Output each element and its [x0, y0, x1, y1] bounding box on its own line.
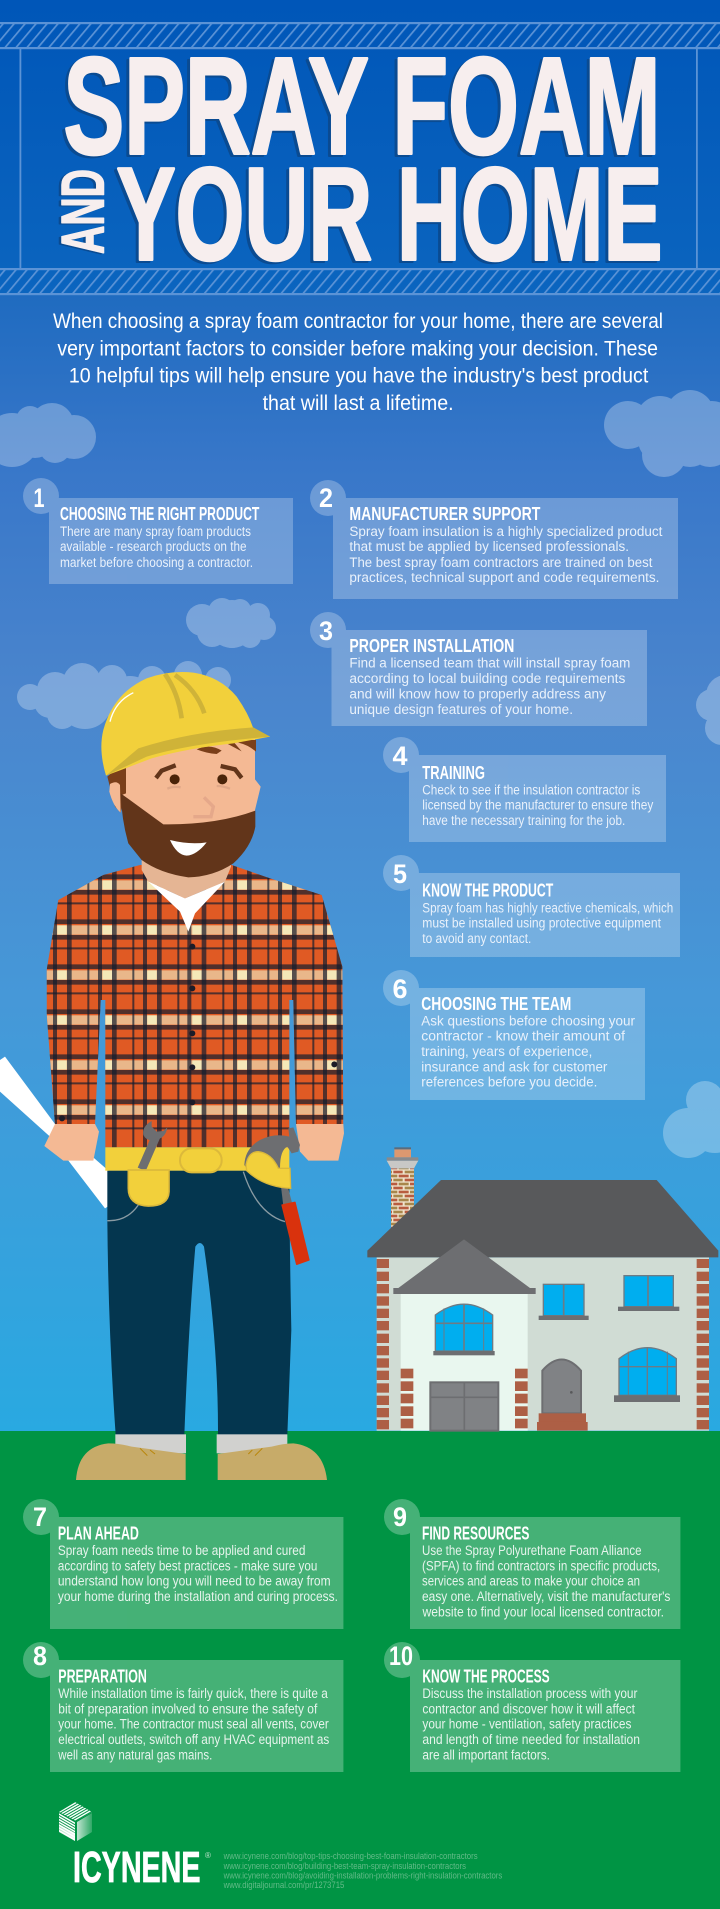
clouds: [0, 390, 720, 1158]
panel: tip 2 manufacturer support: that must be applied by licensed professionals.: [349, 539, 629, 554]
panel: tip 8 preparation: While installation time is fairly quick, there is quite a: [58, 1686, 328, 1701]
panel: tip 6 choosing the team: insurance and ask for customer: [421, 1059, 608, 1074]
header banner: [0, 0, 720, 295]
panel: tip 10 know the process: KNOW THE PROCESS: [422, 1667, 550, 1687]
panel: tip 10 know the process: contractor and discover how it will affect: [422, 1701, 635, 1716]
pants and boots: [76, 1171, 327, 1480]
panel: tip 4 training: have the necessary training for the job.: [422, 813, 625, 828]
panel: tip 1 choosing the right product: [23, 478, 293, 584]
panel: tip 5 know the product: KNOW THE PRODUCT: [422, 881, 553, 901]
panel: tip 8 preparation: bit of preparation involved to ensure the safety of: [58, 1701, 318, 1716]
panel: tip 1 choosing the right product: There are many spray foam products: [60, 524, 251, 539]
panel: tip 8 preparation: electrical outlets, switch off any HVAC equipment as: [58, 1732, 330, 1747]
panel: tip 1 choosing the right product: available - research products on the: [60, 539, 246, 554]
source links: www.digitaljournal.com/pr/1273715: [223, 1880, 344, 1891]
panel: tip 9 find resources: [384, 1499, 680, 1629]
panel: tip 7 plan ahead: Spray foam needs time to be applied and cured: [58, 1543, 305, 1558]
source links: www.icynene.com/blog/top-tips-choosing-best-foam-insulation-contractors: [223, 1851, 478, 1862]
panel: tip 10 know the process: 10: [389, 1641, 413, 1671]
panel: tip 9 find resources: services and areas to make your choice an: [422, 1574, 640, 1589]
panel: tip 7 plan ahead: according to safety best practices - make sure you: [58, 1558, 317, 1573]
main wall: [377, 1257, 709, 1431]
panel: tip 5 know the product: 5: [393, 859, 407, 889]
panel: tip 6 choosing the team: references before you decide.: [421, 1075, 597, 1090]
blueprint roll: [0, 1057, 121, 1208]
panel: tip 3 proper installation: PROPER INSTALLATION: [349, 636, 514, 656]
ground: [0, 1431, 720, 1909]
panel: tip 10 know the process: [384, 1641, 680, 1772]
panel: tip 8 preparation: 8: [33, 1641, 47, 1671]
panel: tip 9 find resources: (SPFA) to find contractors in specific products,: [422, 1558, 660, 1573]
panel: tip 3 proper installation: unique design features of your home.: [349, 702, 573, 717]
panel: tip 4 training: [383, 737, 666, 842]
panel: tip 7 plan ahead: PLAN AHEAD: [58, 1523, 139, 1543]
panel: tip 1 choosing the right product: 1: [34, 483, 44, 513]
panel: tip 5 know the product: must be installed using protective equipment: [422, 916, 661, 931]
intro text: very important factors to consider before making your decision. These: [57, 338, 658, 360]
window middle: [539, 1284, 589, 1320]
panel: tip 7 plan ahead: your home during the installation and curing process.: [58, 1589, 338, 1604]
panel: tip 1 choosing the right product: market before choosing a contractor.: [60, 555, 253, 570]
source links: [223, 1851, 503, 1891]
panel: tip 7 plan ahead: [23, 1499, 343, 1629]
panel: tip 10 know the process: your home - ventilation, safety practices: [422, 1717, 632, 1732]
window upper right: [618, 1276, 679, 1311]
panel: tip 2 manufacturer support: MANUFACTURER SUPPORT: [349, 504, 540, 524]
panel: tip 6 choosing the team: CHOOSING THE TEAM: [421, 994, 571, 1014]
panel: tip 9 find resources: website to find your local licensed contractor.: [422, 1605, 664, 1620]
illustration: house: [367, 1147, 718, 1431]
logo: Icynene cube and wordmark: [59, 1802, 211, 1892]
sky background: [0, 295, 720, 1431]
panel: tip 7 plan ahead: understand how long you will need to be away from: [58, 1574, 331, 1589]
front bay: [401, 1294, 528, 1431]
panel: tip 6 choosing the team: Ask questions before choosing your: [421, 1013, 635, 1028]
panel: tip 6 choosing the team: 6: [392, 974, 408, 1004]
front door: [537, 1359, 588, 1431]
panel: tip 5 know the product: to avoid any contact.: [422, 931, 531, 946]
panel: tip 9 find resources: easy one. Alternatively, visit the manufacturer's: [422, 1589, 671, 1604]
panel: tip 2 manufacturer support: The best spray foam contractors are trained on best: [349, 555, 653, 570]
arched window front: [433, 1304, 495, 1355]
main roof: [367, 1180, 718, 1257]
panel: tip 6 choosing the team: contractor - know their amount of: [421, 1029, 625, 1044]
source links: www.icynene.com/blog/avoiding-installation-problems-right-insulation-contractors: [223, 1870, 503, 1882]
panel: tip 6 choosing the team: [383, 970, 645, 1100]
panel: tip 6 choosing the team: training, years of experience,: [421, 1044, 592, 1059]
garage door: [430, 1382, 498, 1431]
panel: tip 9 find resources: FIND RESOURCES: [422, 1523, 529, 1543]
panel: tip 3 proper installation: and will know how to properly address any: [349, 686, 606, 701]
logo: Icynene cube and wordmark: ICYNENE: [73, 1843, 200, 1892]
intro text: that will last a lifetime.: [263, 392, 454, 415]
logo: Icynene cube and wordmark: ®: [205, 1851, 211, 1860]
title: AND: [50, 169, 116, 254]
panel: tip 2 manufacturer support: 2: [319, 483, 333, 513]
icon: cube: [59, 1802, 92, 1841]
panel: tip 7 plan ahead: 7: [33, 1502, 47, 1532]
panel: tip 4 training: Check to see if the insulation contractor is: [422, 782, 641, 797]
panel: tip 3 proper installation: 3: [319, 616, 333, 646]
intro text: When choosing a spray foam contractor for your home, there are several: [53, 310, 663, 333]
panel: tip 4 training: licensed by the manufacturer to ensure they: [422, 798, 654, 813]
belt, hands and tools: [44, 1121, 344, 1264]
source links: www.icynene.com/blog/building-best-team-spray-insulation-contractors: [223, 1861, 466, 1872]
intro text: 10 helpful tips will help ensure you have the industry's best product: [69, 364, 648, 388]
panel: tip 10 know the process: are all important factors.: [422, 1747, 550, 1762]
front roof: [393, 1239, 536, 1294]
panel: tip 8 preparation: your home. The contractor must seal all vents, cover: [58, 1717, 329, 1732]
title: [47, 30, 662, 290]
title: AND: [47, 170, 114, 255]
plaid shirt and head: [43, 672, 347, 1150]
panel: tip 1 choosing the right product: CHOOSING THE RIGHT PRODUCT: [60, 504, 259, 524]
panel: tip 2 manufacturer support: practices, technical support and code requirements.: [349, 570, 659, 585]
panel: tip 3 proper installation: Find a licensed team that will install spray foam: [349, 656, 630, 671]
panel: tip 3 proper installation: [310, 612, 647, 726]
panel: tip 9 find resources: Use the Spray Polyurethane Foam Alliance: [422, 1543, 642, 1558]
chimney: [387, 1147, 418, 1228]
panel: tip 10 know the process: and length of time needed for installation: [422, 1732, 640, 1747]
panel: tip 2 manufacturer support: Spray foam insulation is a highly specialized product: [349, 524, 663, 539]
illustration: worker: [0, 672, 347, 1480]
panel: tip 4 training: TRAINING: [422, 763, 485, 783]
panel: tip 5 know the product: [383, 855, 680, 957]
panel: tip 5 know the product: Spray foam has highly reactive chemicals, which: [422, 900, 673, 915]
arched window right: [614, 1347, 680, 1402]
panel: tip 8 preparation: [23, 1641, 343, 1772]
panel: tip 10 know the process: Discuss the installation process with your: [422, 1686, 638, 1701]
panel: tip 9 find resources: 9: [393, 1502, 407, 1532]
panel: tip 2 manufacturer support: [310, 480, 678, 599]
panel: tip 4 training: 4: [392, 741, 408, 771]
intro text: [53, 310, 663, 415]
panel: tip 8 preparation: PREPARATION: [58, 1667, 147, 1687]
panel: tip 8 preparation: well as any natural gas mains.: [57, 1747, 212, 1762]
panel: tip 3 proper installation: according to local building code requirements: [349, 671, 626, 686]
